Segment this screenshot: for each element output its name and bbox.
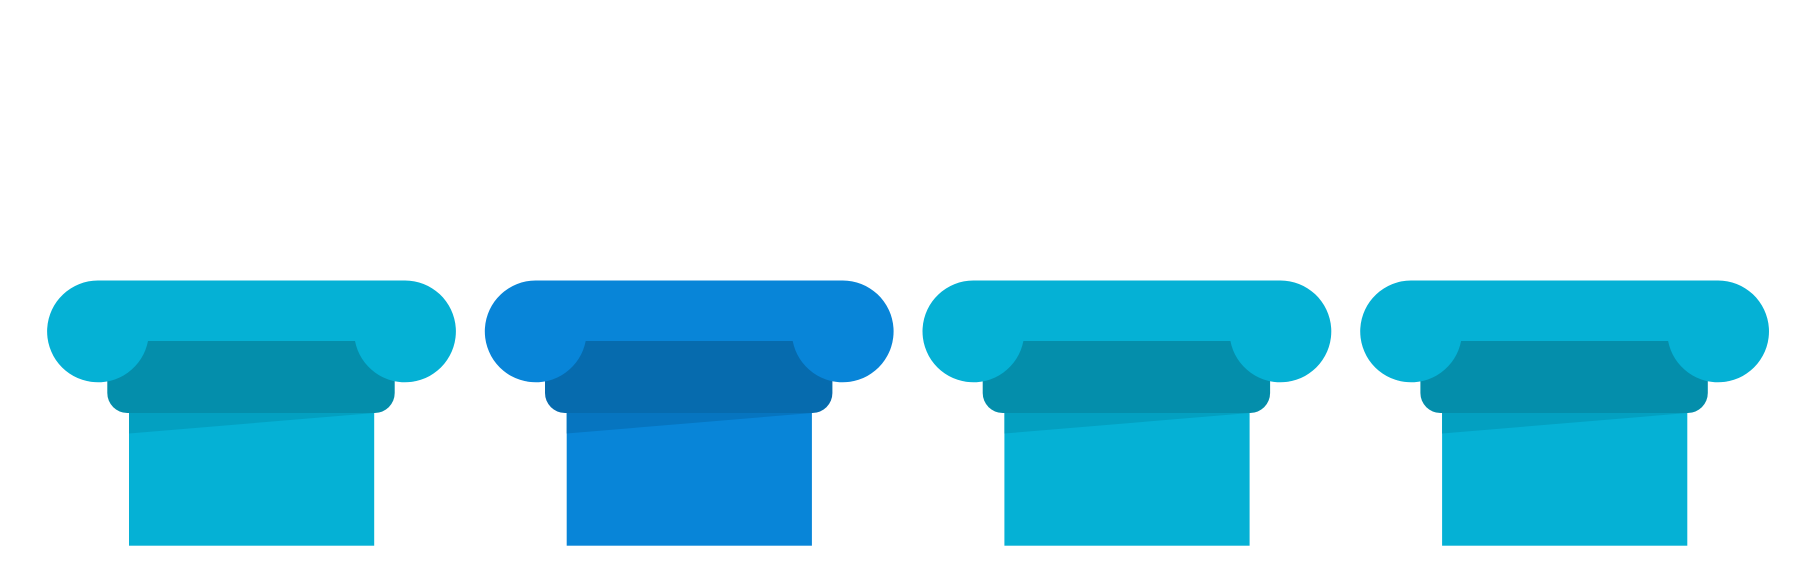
pillar 4: teal — [1360, 280, 1769, 546]
pillar 1: teal — [47, 280, 456, 546]
pillar 3 shaft shadow — [1004, 413, 1250, 434]
pillar 3 shaft — [1004, 413, 1250, 546]
pillar 4 neck — [1420, 335, 1708, 413]
pillar 1 capital — [47, 280, 456, 382]
pillar 1 neck — [107, 335, 395, 413]
pillar 1 shaft shadow — [129, 413, 374, 434]
pillar 2 neck — [545, 335, 832, 413]
pillar 3 neck — [983, 335, 1270, 413]
pillar 1 shaft — [129, 413, 374, 546]
pillar 2 shaft shadow — [567, 413, 812, 434]
pillar 2 shaft — [567, 413, 812, 546]
pillar 4 capital — [1360, 280, 1769, 382]
pillar 3: teal — [923, 280, 1331, 546]
pillar 2 capital — [485, 280, 894, 382]
pillar 2: blue — [485, 280, 894, 546]
pillar 4 shaft — [1442, 413, 1687, 546]
pillar 3 capital — [923, 280, 1331, 382]
pillar 4 shaft shadow — [1442, 413, 1687, 434]
